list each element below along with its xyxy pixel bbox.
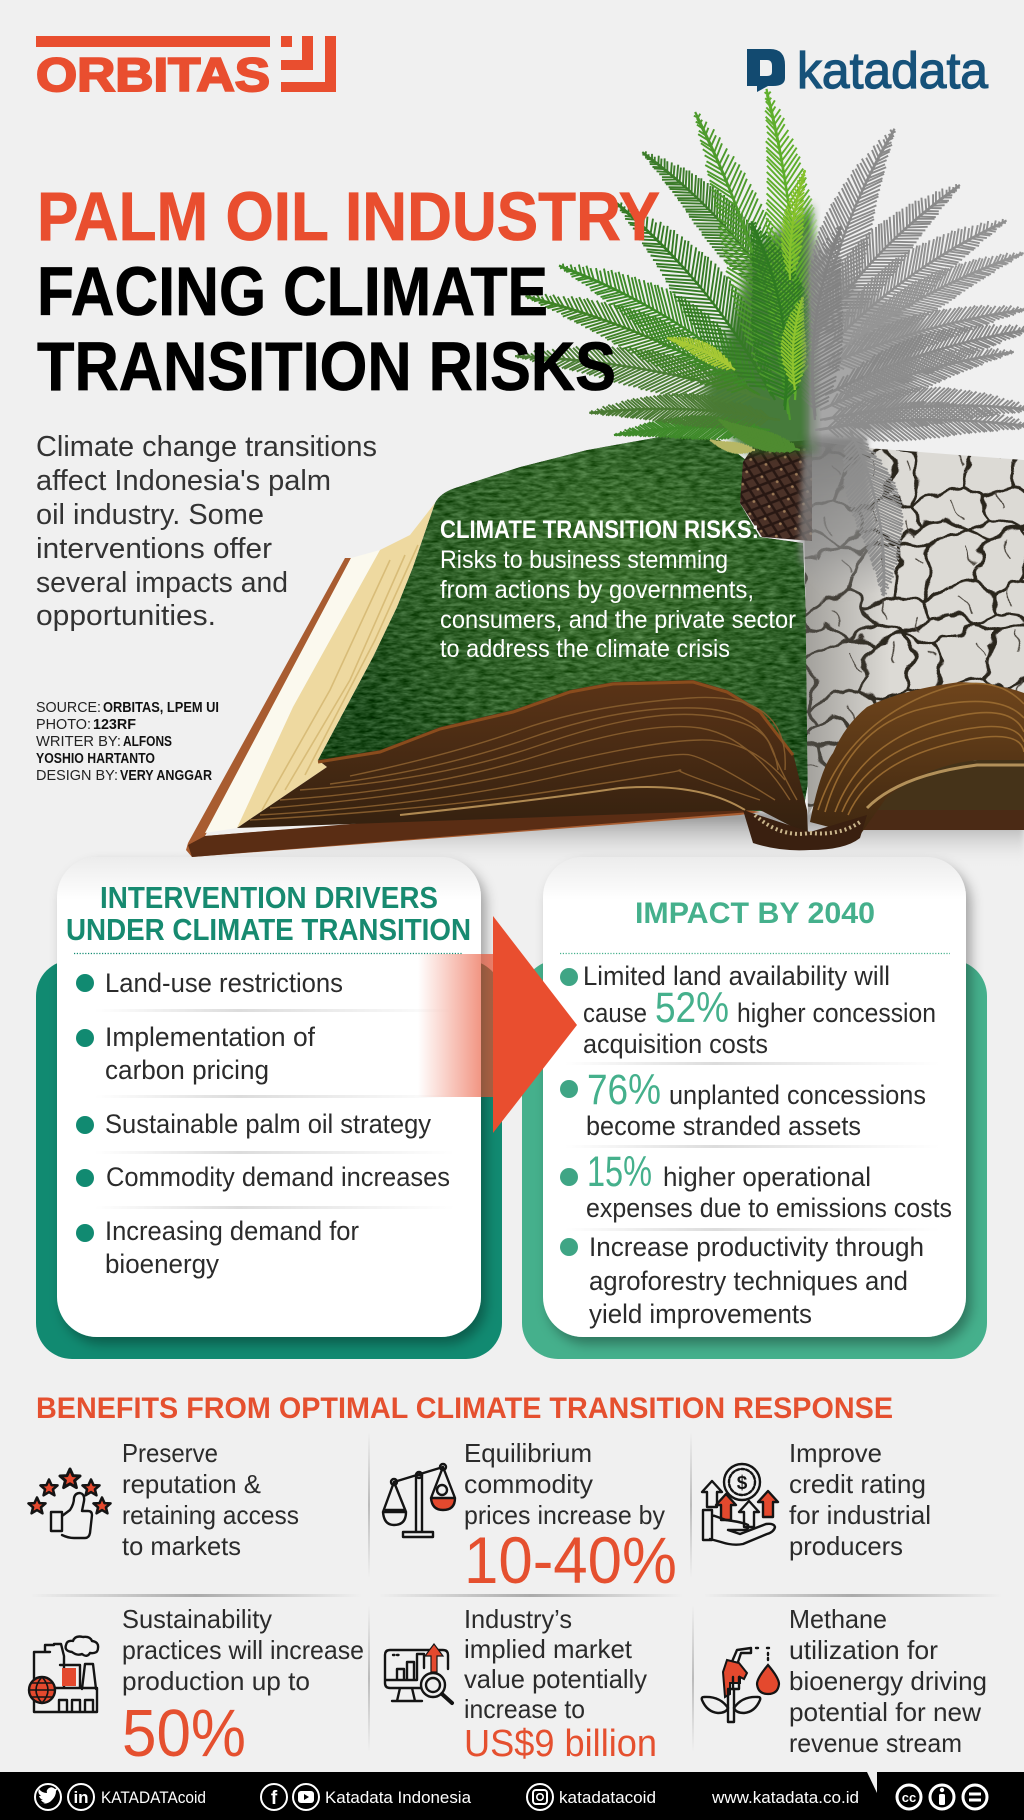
credits: ORBITAS, LPEM UI <box>103 700 219 716</box>
social: facebook and youtube: f <box>271 1788 278 1809</box>
social: instagram: katadatacoid <box>559 1788 656 1807</box>
title: PALM OIL INDUSTRY <box>37 178 660 255</box>
list: impacts: Increase productivity through <box>589 1232 924 1262</box>
credits <box>36 700 219 784</box>
list: drivers: Implementation of <box>105 1022 315 1052</box>
benefit: commodity prices: commodity <box>464 1469 593 1499</box>
credits: VERY ANGGAR <box>120 768 212 784</box>
left page block <box>237 680 808 835</box>
benefit: commodity prices: 10-40% <box>464 1523 677 1597</box>
title: FACING CLIMATE <box>37 253 548 330</box>
book cover left <box>186 558 760 857</box>
benefit: market value: implied market <box>464 1634 633 1664</box>
licence icons: cc <box>902 1790 916 1805</box>
benefit: market value: increase to <box>464 1694 585 1724</box>
benefit: commodity prices: prices increase by <box>464 1500 665 1530</box>
social: twitter and linkedin: in <box>73 1788 89 1807</box>
list: impacts: agroforestry techniques and <box>589 1266 908 1296</box>
benefit dividers <box>30 1432 1002 1752</box>
benefit: methane: utilization for <box>789 1635 938 1665</box>
cover base band <box>188 795 750 857</box>
list: impacts <box>560 961 952 1329</box>
social: twitter and linkedin <box>35 1784 206 1810</box>
list: drivers <box>76 968 455 1279</box>
icon: scales <box>383 1464 455 1537</box>
list: impacts: 15% <box>587 1148 652 1196</box>
social: twitter and linkedin: KATADATAcoid <box>101 1788 206 1807</box>
icon: thumbs up with stars <box>28 1469 110 1538</box>
list: impacts: higher concession <box>737 998 936 1028</box>
benefit: methane: bioenergy driving <box>789 1666 987 1696</box>
callout: climate transition risks: consumers, and the private sector <box>440 606 796 634</box>
callout: climate transition risks <box>440 516 796 663</box>
benefit: production <box>29 1604 364 1771</box>
benefit: commodity prices: Equilibrium <box>464 1438 592 1468</box>
list: drivers: carbon pricing <box>105 1055 269 1085</box>
heading: intervention drivers: UNDER CLIMATE TRANSITION <box>66 912 471 947</box>
list: impacts: become stranded assets <box>586 1111 861 1141</box>
benefit: market value: US$9 billion <box>464 1723 657 1765</box>
icon: hand with coin and arrows <box>702 1464 778 1545</box>
callout: climate transition risks: CLIMATE TRANSITION RISKS: <box>440 516 759 544</box>
list: impacts: higher operational <box>663 1162 871 1192</box>
intro paragraph <box>36 431 377 632</box>
benefit: production: production up to <box>122 1666 310 1696</box>
benefit: market value: value potentially <box>464 1664 647 1694</box>
benefit: credit rating: credit rating <box>789 1469 926 1499</box>
benefit: reputation <box>28 1438 299 1561</box>
list: impacts: 76% <box>587 1066 661 1114</box>
credits: ALFONS <box>123 734 172 750</box>
palm fronds: green half <box>513 85 834 463</box>
list: drivers: Sustainable palm oil strategy <box>105 1109 431 1139</box>
benefit: production: practices will increase <box>122 1635 364 1665</box>
benefit: credit rating: Improve <box>789 1438 882 1468</box>
icon: factory and globe <box>29 1636 98 1712</box>
palm trunk <box>740 436 880 600</box>
benefit: methane: Methane <box>789 1604 887 1634</box>
benefit: commodity prices <box>383 1438 677 1597</box>
benefit: market value <box>385 1604 657 1765</box>
icon: fuel nozzle plant and drop <box>702 1648 779 1722</box>
logo: Katadata: katadata <box>797 42 989 99</box>
credits: WRITER BY: <box>36 734 121 750</box>
benefit: production: Sustainability <box>122 1604 272 1634</box>
intro paragraph: opportunities. <box>36 600 216 632</box>
intro paragraph: interventions offer <box>36 533 272 565</box>
list: drivers: bioenergy <box>105 1249 219 1279</box>
credits: PHOTO: <box>36 717 91 733</box>
benefit: credit rating <box>702 1438 931 1561</box>
list: impacts: expenses due to emissions costs <box>586 1193 952 1223</box>
credits: DESIGN BY: <box>36 768 118 784</box>
benefit: reputation: reputation & <box>122 1469 261 1499</box>
benefit: reputation: retaining access <box>122 1500 299 1530</box>
arrow <box>418 916 577 1133</box>
title: TRANSITION RISKS <box>37 328 616 405</box>
heading: benefits: BENEFITS FROM OPTIMAL CLIMATE TRANSITION RESPONSE <box>36 1392 893 1425</box>
benefit: production: 50% <box>122 1696 246 1771</box>
book spine <box>743 810 867 850</box>
benefit: reputation: Preserve <box>122 1438 218 1468</box>
list: impacts: acquisition costs <box>583 1029 768 1059</box>
callout: climate transition risks: to address the climate crisis <box>440 635 730 663</box>
credits: SOURCE: <box>36 700 101 716</box>
panel: impact by 2040 <box>522 857 987 1359</box>
icon: hand with coin and arrows: $ <box>737 1473 748 1494</box>
list: impacts: unplanted concessions <box>669 1080 926 1110</box>
benefit: reputation: to markets <box>122 1531 241 1561</box>
title <box>37 178 660 405</box>
callout: climate transition risks: Risks to business stemming <box>440 546 728 574</box>
benefit: market value: Industry’s <box>464 1604 572 1634</box>
heading: intervention drivers <box>66 880 471 947</box>
licence icons <box>897 1785 987 1809</box>
heading: intervention drivers: INTERVENTION DRIVERS <box>100 880 438 915</box>
right page block <box>810 682 1024 835</box>
logo: Orbitas <box>36 36 336 101</box>
benefit: methane: revenue stream <box>789 1728 962 1758</box>
intro paragraph: oil industry. Some <box>36 499 264 531</box>
footer <box>0 1772 1024 1820</box>
list: drivers: Commodity demand increases <box>106 1162 450 1192</box>
illustration: book with palm tree <box>150 85 1024 868</box>
social: instagram <box>527 1784 656 1810</box>
intro paragraph: Climate change transitions <box>36 431 377 463</box>
benefit: methane: potential for new <box>789 1697 981 1727</box>
list: drivers: Increasing demand for <box>105 1216 359 1246</box>
palm fronds: grey half <box>801 128 1024 596</box>
white page strip <box>205 550 380 833</box>
cream pages <box>237 503 435 828</box>
cracked ground <box>804 444 1024 814</box>
list: impacts: Limited land availability will <box>583 961 890 991</box>
benefit: credit rating: for industrial <box>789 1500 931 1530</box>
credits: 123RF <box>93 717 136 733</box>
grass hill <box>318 435 808 813</box>
website: www.katadata.co.id <box>711 1788 859 1807</box>
book shadow <box>150 812 1024 868</box>
intro paragraph: several impacts and <box>36 567 288 599</box>
benefit: methane <box>702 1604 987 1758</box>
logo: Orbitas: ORBITAS <box>36 48 270 101</box>
intro paragraph: affect Indonesia's palm <box>36 465 331 497</box>
benefit: credit rating: producers <box>789 1531 903 1561</box>
list: impacts: yield improvements <box>589 1299 812 1329</box>
icon: monitor chart <box>385 1644 452 1703</box>
social: facebook and youtube <box>261 1784 472 1810</box>
social: facebook and youtube: Katadata Indonesia <box>325 1788 472 1807</box>
list: drivers: Land-use restrictions <box>105 968 343 998</box>
panel: intervention drivers <box>36 857 502 1359</box>
list: impacts: 52% <box>655 984 729 1032</box>
callout: climate transition risks: from actions by governments, <box>440 576 754 604</box>
heading: impact by 2040: IMPACT BY 2040 <box>635 897 875 930</box>
list: impacts: cause <box>583 998 647 1028</box>
credits: YOSHIO HARTANTO <box>36 751 155 767</box>
